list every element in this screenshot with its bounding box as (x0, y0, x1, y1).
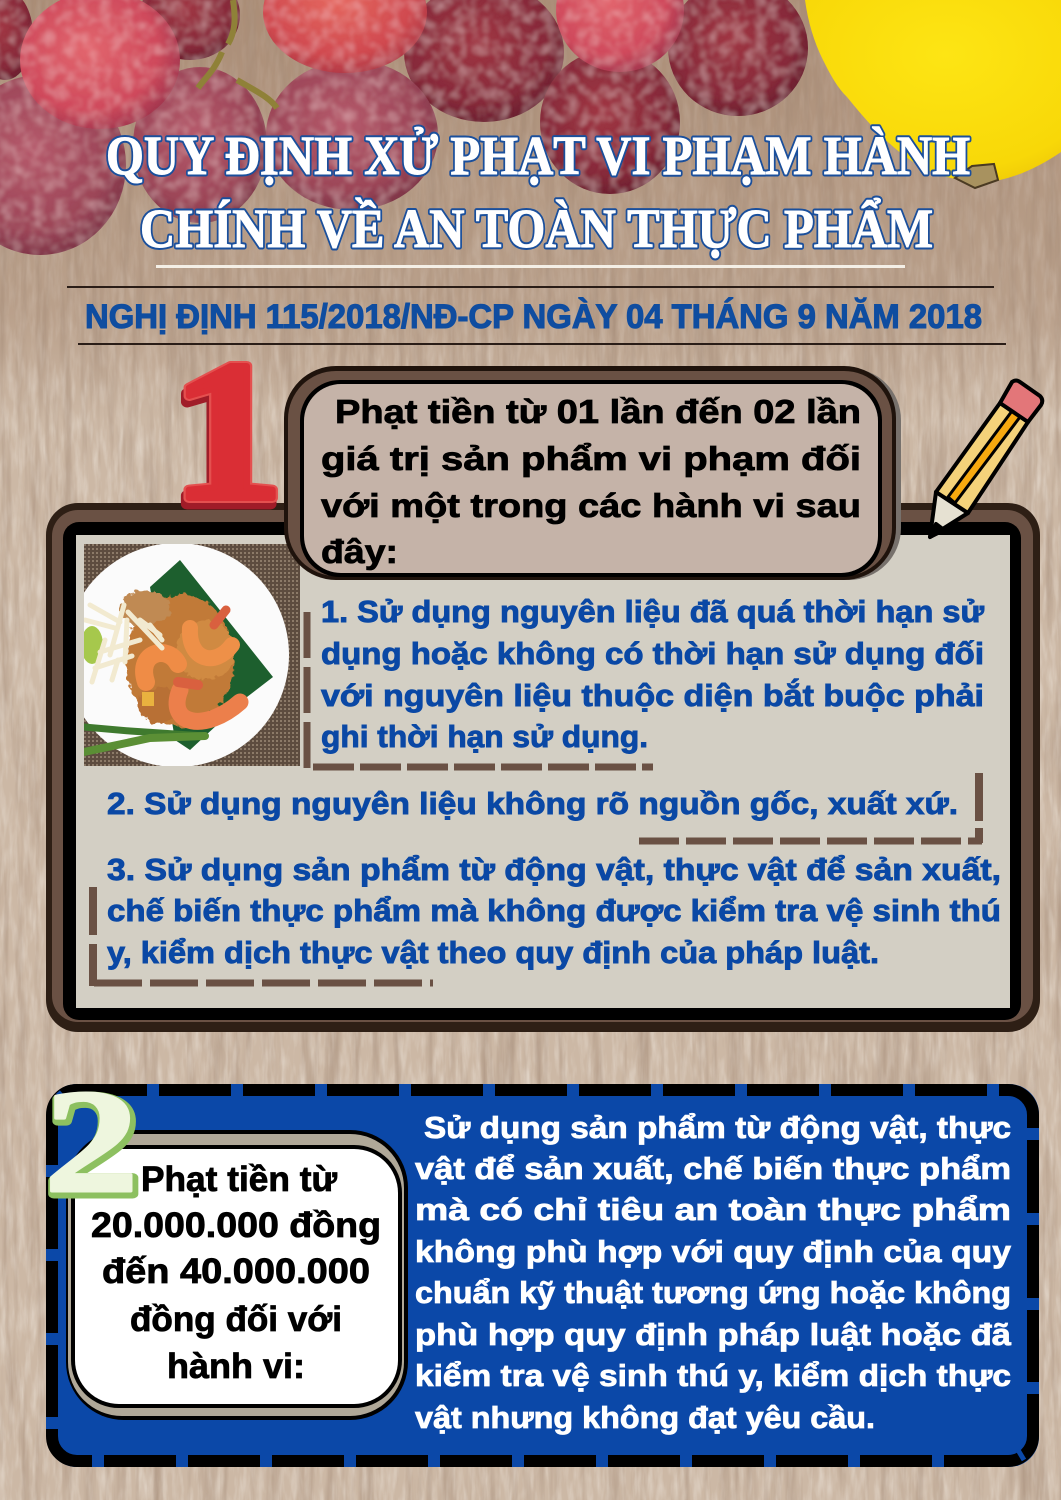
heading box 1: fine statement: giá trị sản phẩm vi phạm đối (321, 440, 861, 477)
violation description: kiểm tra vệ sinh thú y, kiểm dịch thực (415, 1358, 1011, 1393)
title: QUY ĐỊNH XỬ PHẠT VI PHẠM HÀNH (106, 125, 970, 186)
violation description: không phù hợp với quy định của quy (415, 1234, 1012, 1269)
item 3 text: 3. Sử dụng sản phẩm từ động vật, thực vật để sản xuất, (107, 852, 1001, 887)
fine box: hành vi: (167, 1347, 305, 1386)
violation description: vật nhưng không đạt yêu cầu. (415, 1400, 875, 1435)
icon: pencil (930, 380, 1042, 537)
numeral 1: 1 (169, 327, 282, 548)
violation description: chuẩn kỹ thuật tương ứng hoặc không (415, 1275, 1011, 1310)
violation description: phù hợp quy định pháp luật hoặc đã (415, 1317, 1012, 1352)
panel 1: violations list (46, 503, 1040, 1032)
title: QUY ĐỊNH XỬ PHẠT VI PHẠM HÀNH (106, 125, 970, 186)
panel 2: second fine (44, 1060, 1039, 1467)
fine box: 20.000.000 đồng (91, 1206, 381, 1245)
item 1 text: với nguyên liệu thuộc diện bắt buộc phải (321, 677, 984, 713)
item 3 text: chế biến thực phẩm mà không được kiểm tra vệ sinh thú (107, 893, 1001, 928)
numeral 2: 2 (46, 1063, 141, 1226)
fine box: đồng đối với (130, 1300, 342, 1339)
item 1 text: dụng hoặc không có thời hạn sử dụng đối (321, 636, 984, 671)
item 1 text: ghi thời hạn sử dụng. (321, 719, 648, 754)
item 1 text: 1. Sử dụng nguyên liệu đã quá thời hạn sử (321, 594, 985, 629)
item 3 text (107, 852, 1001, 970)
numeral 2: 2 (44, 1060, 139, 1223)
violation description: mà có chỉ tiêu an toàn thực phẩm (415, 1192, 1011, 1227)
subtitle: decree reference: NGHỊ ĐỊNH 115/2018/NĐ-CP NGÀY 04 THÁNG 9 NĂM 2018 (85, 298, 982, 336)
item 1 text (321, 594, 985, 754)
heading box 1: fine statement (284, 366, 901, 580)
photo: grapes and lemon (0, 0, 1061, 255)
heading box 1: fine statement: với một trong các hành vi sau (321, 487, 861, 524)
food photo (65, 543, 300, 767)
fine box: Phạt tiền từ (141, 1160, 338, 1199)
numeral 1: 1 (171, 321, 284, 542)
fine box: đến 40.000.000 (102, 1252, 370, 1291)
numeral 1: 1 (171, 321, 284, 542)
violation description (415, 1110, 1012, 1435)
violation description: vật để sản xuất, chế biến thực phẩm (415, 1151, 1011, 1186)
fine box (66, 1130, 408, 1420)
item 2 text: 2. Sử dụng nguyên liệu không rõ nguồn gốc, xuất xứ. (107, 786, 958, 821)
item 3 text: y, kiểm dịch thực vật theo quy định của pháp luật. (107, 935, 879, 970)
title: CHÍNH VỀ AN TOÀN THỰC PHẨM (140, 198, 933, 259)
heading box 1: fine statement: Phạt tiền từ 01 lần đến 02 lần (335, 393, 861, 430)
heading box 1: fine statement: đây: (321, 533, 398, 570)
violation description: Sử dụng sản phẩm từ động vật, thực (424, 1110, 1011, 1145)
title (106, 125, 970, 259)
title: CHÍNH VỀ AN TOÀN THỰC PHẨM (140, 198, 933, 259)
